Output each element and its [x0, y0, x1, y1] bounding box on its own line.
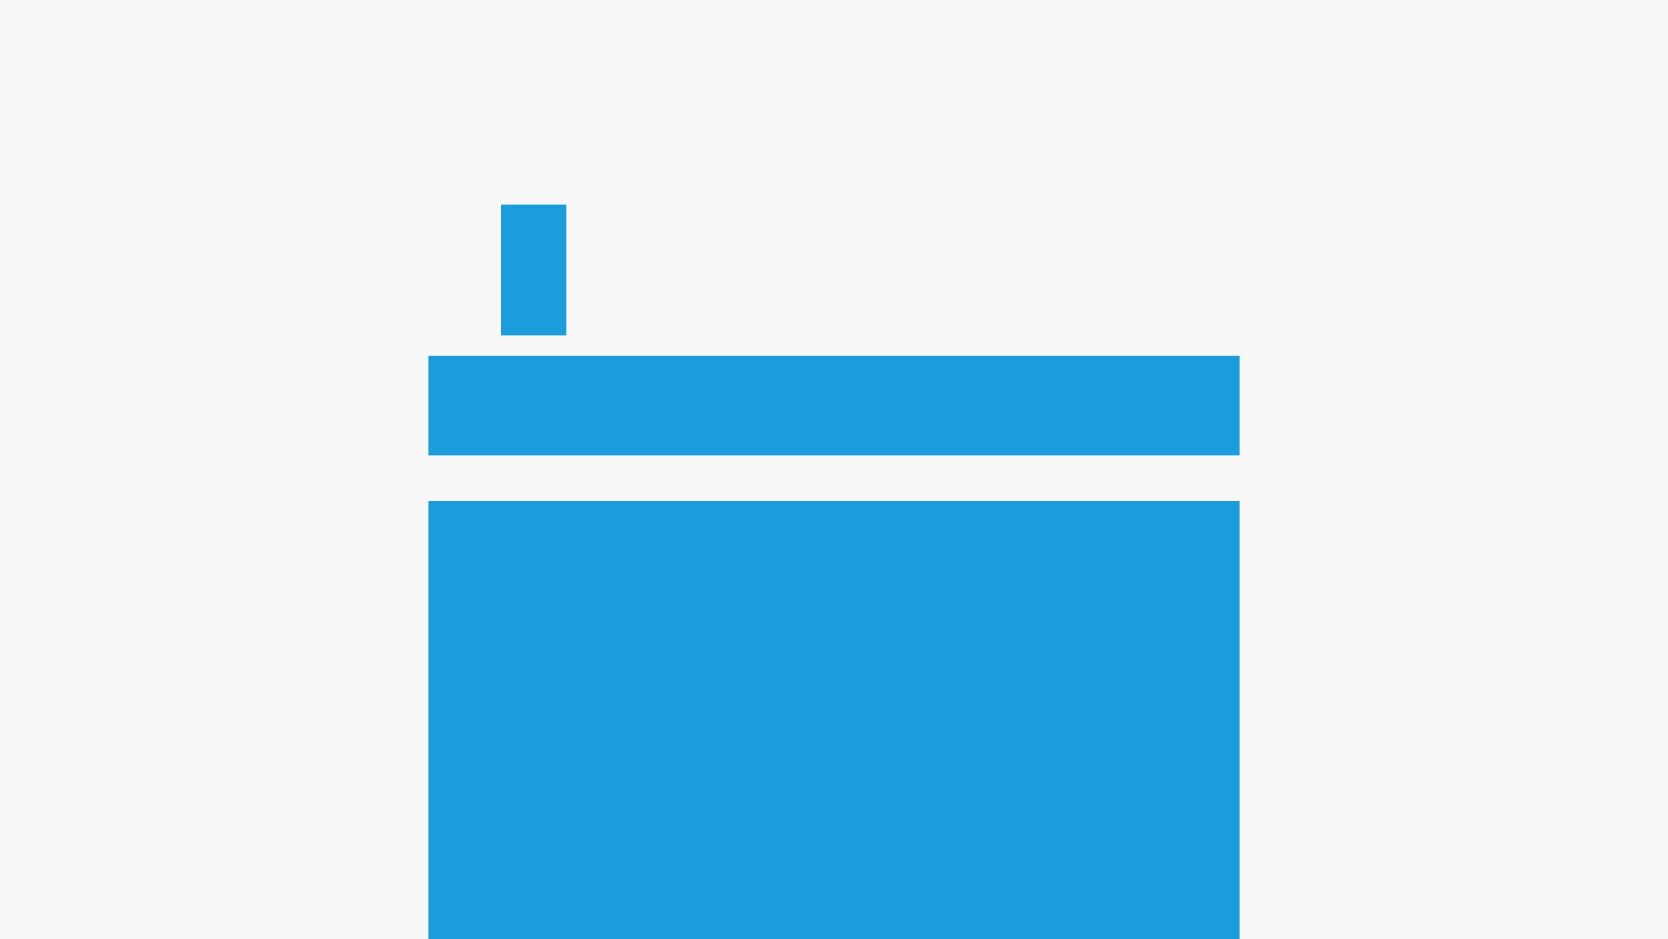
large blue panel	[428, 501, 1240, 939]
wide blue band	[428, 356, 1240, 455]
small blue block	[501, 205, 566, 335]
